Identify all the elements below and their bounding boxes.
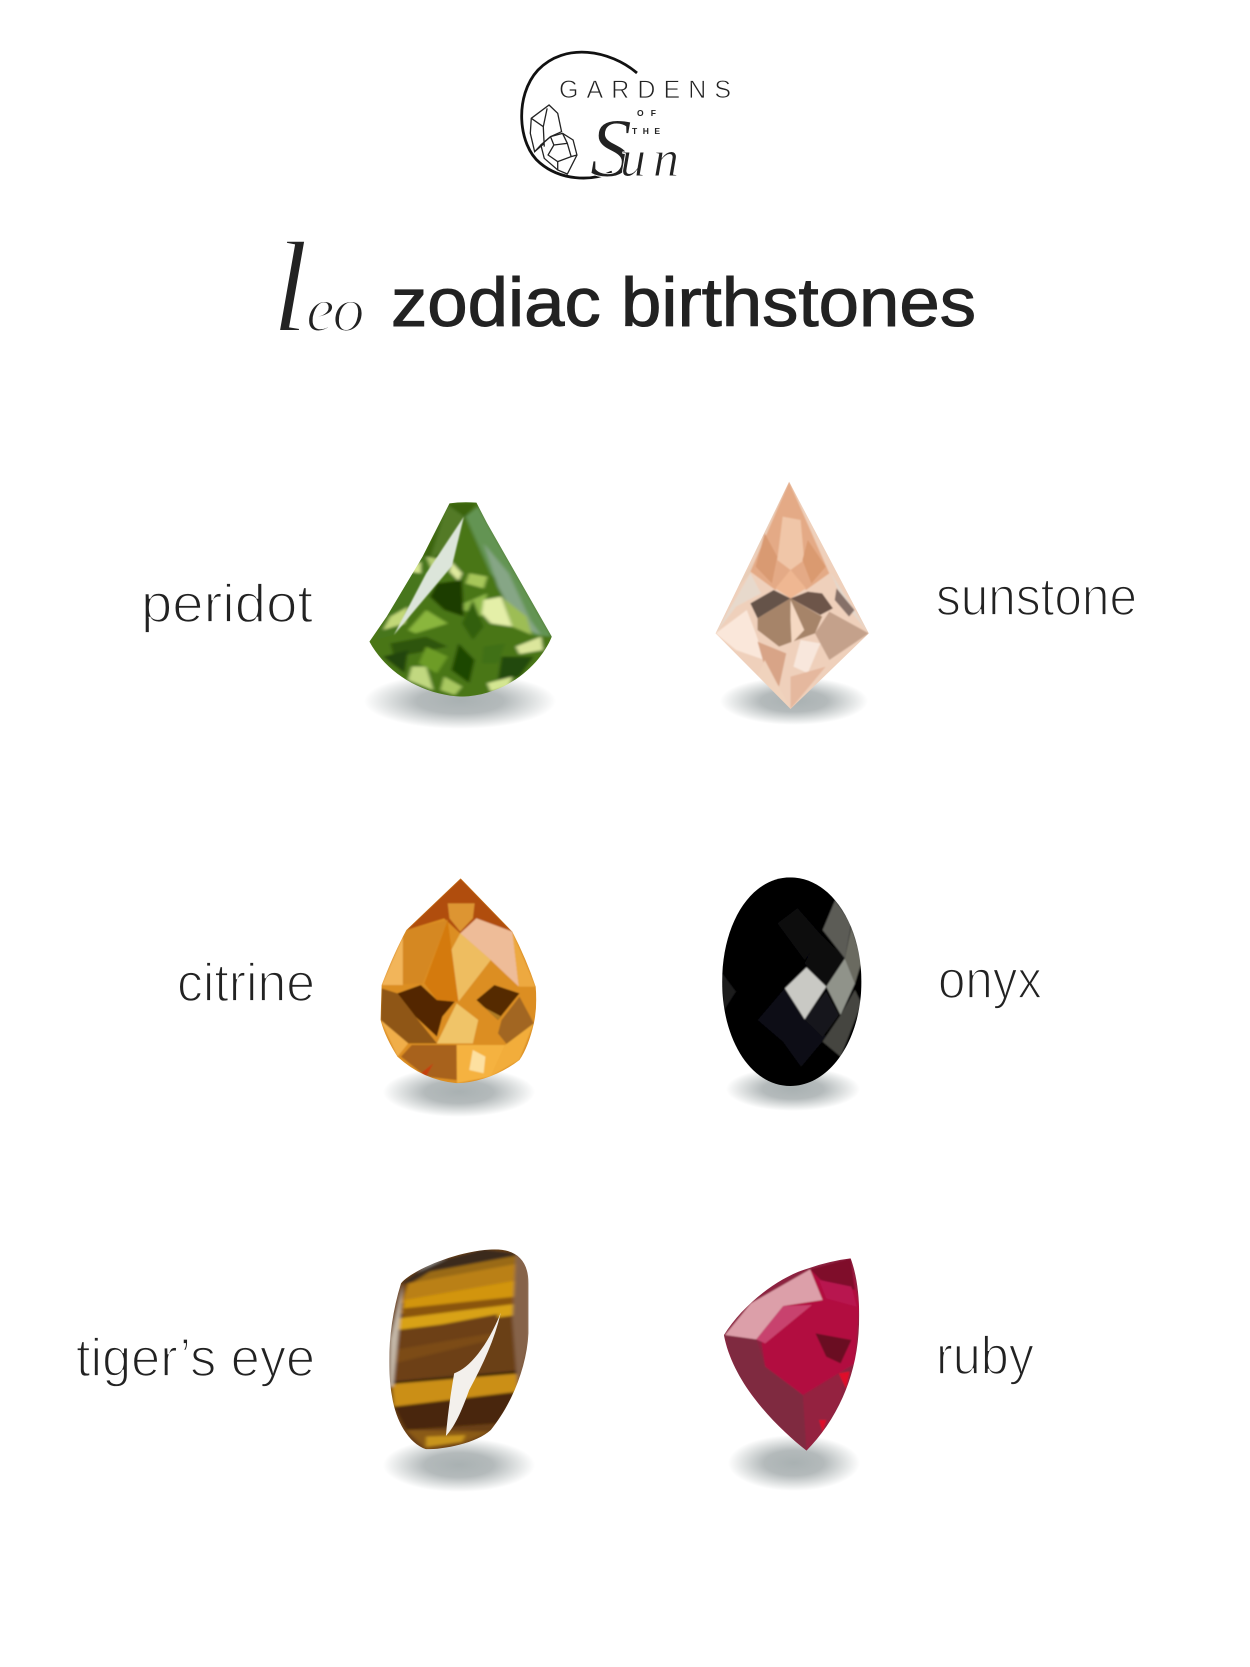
- panel: sunstone: [711, 477, 1137, 725]
- panel: citrine: [177, 873, 541, 1117]
- panel: ruby: [719, 1253, 1034, 1491]
- label: sunstone: sunstone: [936, 567, 1137, 627]
- tiger's eye highlight: [446, 1313, 501, 1436]
- peridot white streak: [394, 517, 464, 635]
- label: tiger's eye: tiger’s eye: [76, 1328, 315, 1388]
- title: [272, 216, 976, 360]
- title words: zodiac birthstones: zodiac birthstones: [391, 264, 976, 341]
- gem: peridot: [370, 502, 552, 697]
- panel: onyx: [719, 873, 1042, 1111]
- label: ruby: ruby: [936, 1326, 1034, 1386]
- logo: Gardens of the Sun: [522, 52, 731, 195]
- gem: tiger's eye: [387, 1247, 530, 1453]
- logo arc: [522, 52, 637, 178]
- logo word: GARDENS: GARDENS: [559, 76, 731, 104]
- title word: leo: leo: [272, 216, 364, 360]
- logo word: THE: THE: [632, 126, 660, 136]
- shadow: tiger's eye: [383, 1438, 535, 1492]
- shadow: sunstone: [720, 677, 868, 725]
- shadow: onyx: [726, 1067, 860, 1111]
- shadow: peridot: [364, 673, 556, 729]
- shadow: ruby: [728, 1435, 860, 1491]
- gem: onyx: [719, 873, 866, 1090]
- panel: tiger's eye: [76, 1247, 535, 1492]
- gem: citrine: [376, 873, 541, 1087]
- label: citrine: citrine: [177, 953, 315, 1013]
- gem: sunstone: [711, 477, 872, 713]
- logo word: Sun: Sun: [590, 102, 686, 195]
- label: peridot: peridot: [141, 574, 313, 634]
- logo crystal icon: [530, 105, 577, 174]
- shadow: citrine: [383, 1067, 535, 1117]
- logo word: OF: OF: [637, 108, 656, 118]
- label: onyx: onyx: [938, 950, 1042, 1010]
- gem: ruby: [724, 1258, 860, 1450]
- panel: peridot: [141, 497, 559, 729]
